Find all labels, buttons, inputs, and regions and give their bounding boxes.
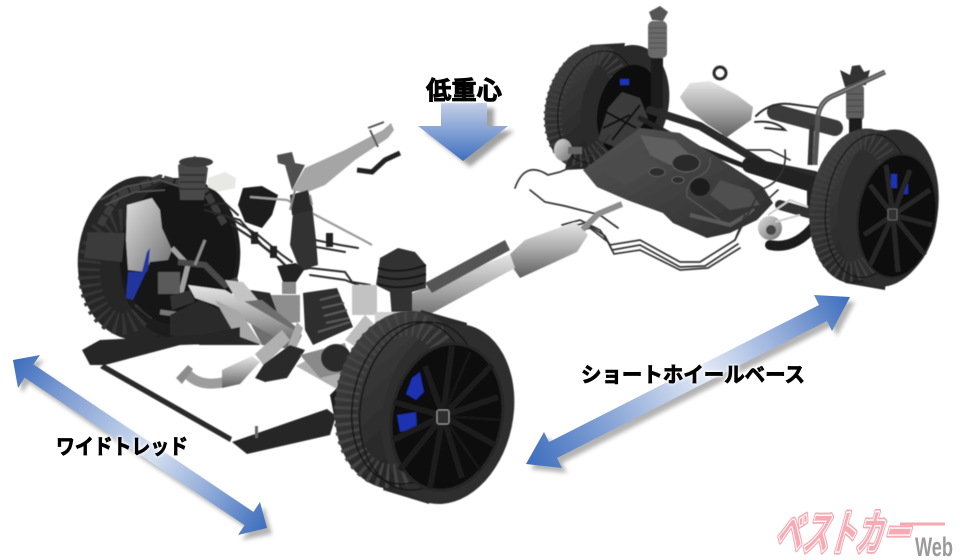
- label: ショートホイールベース: ショートホイールベース: [581, 364, 805, 387]
- front right strut: [352, 248, 426, 328]
- fuel tank: [583, 128, 773, 238]
- steering column: [277, 122, 400, 270]
- blue brake caliper: [406, 372, 424, 400]
- exhaust and central tunnel: [395, 204, 622, 325]
- rear axle assembly with fuel tank: [515, 6, 949, 293]
- brake reservoir: [208, 172, 236, 192]
- rear crossmember and suspension links: [640, 104, 835, 246]
- front driveshaft: [170, 280, 302, 350]
- rear silencer: [680, 81, 753, 137]
- front lower arm: [170, 300, 260, 345]
- label: 低重心: 低重心: [426, 77, 502, 105]
- front exhaust catalyst: [176, 322, 305, 388]
- exhaust pipe: [580, 204, 622, 232]
- front right wheel: [319, 298, 530, 517]
- steering gear and ball joint: [250, 263, 304, 325]
- rear brake and fuel lines: [515, 135, 790, 270]
- arrow: short wheelbase: [526, 295, 855, 473]
- wheel badge: [437, 410, 449, 424]
- muffler: [506, 222, 588, 278]
- front left upright: [126, 198, 238, 318]
- arrow: wide track: [13, 355, 272, 540]
- tunnel brace: [425, 240, 510, 293]
- tire: [319, 298, 530, 517]
- rear right air shock and filler pipe: [810, 65, 885, 165]
- front left wheel: [70, 170, 248, 346]
- rear hubs: [554, 139, 808, 240]
- front suspension assembly: [70, 122, 426, 454]
- front wiring harness: [205, 203, 370, 290]
- center pipe: [395, 254, 515, 325]
- bright brake pipe: [250, 197, 372, 245]
- rear right wheel: [800, 122, 949, 293]
- rear left air shock: [648, 6, 668, 108]
- front subframe: [82, 315, 380, 454]
- rim: [378, 333, 516, 501]
- rear silencer mount: [714, 67, 726, 79]
- label: ワイドトレッド: ワイドトレッド: [56, 436, 188, 459]
- front left strut: [178, 156, 213, 200]
- control unit box: [303, 288, 353, 345]
- master cylinder: [238, 186, 278, 228]
- rear left wheel: [532, 35, 682, 179]
- arrow: low centre of gravity: [418, 103, 514, 167]
